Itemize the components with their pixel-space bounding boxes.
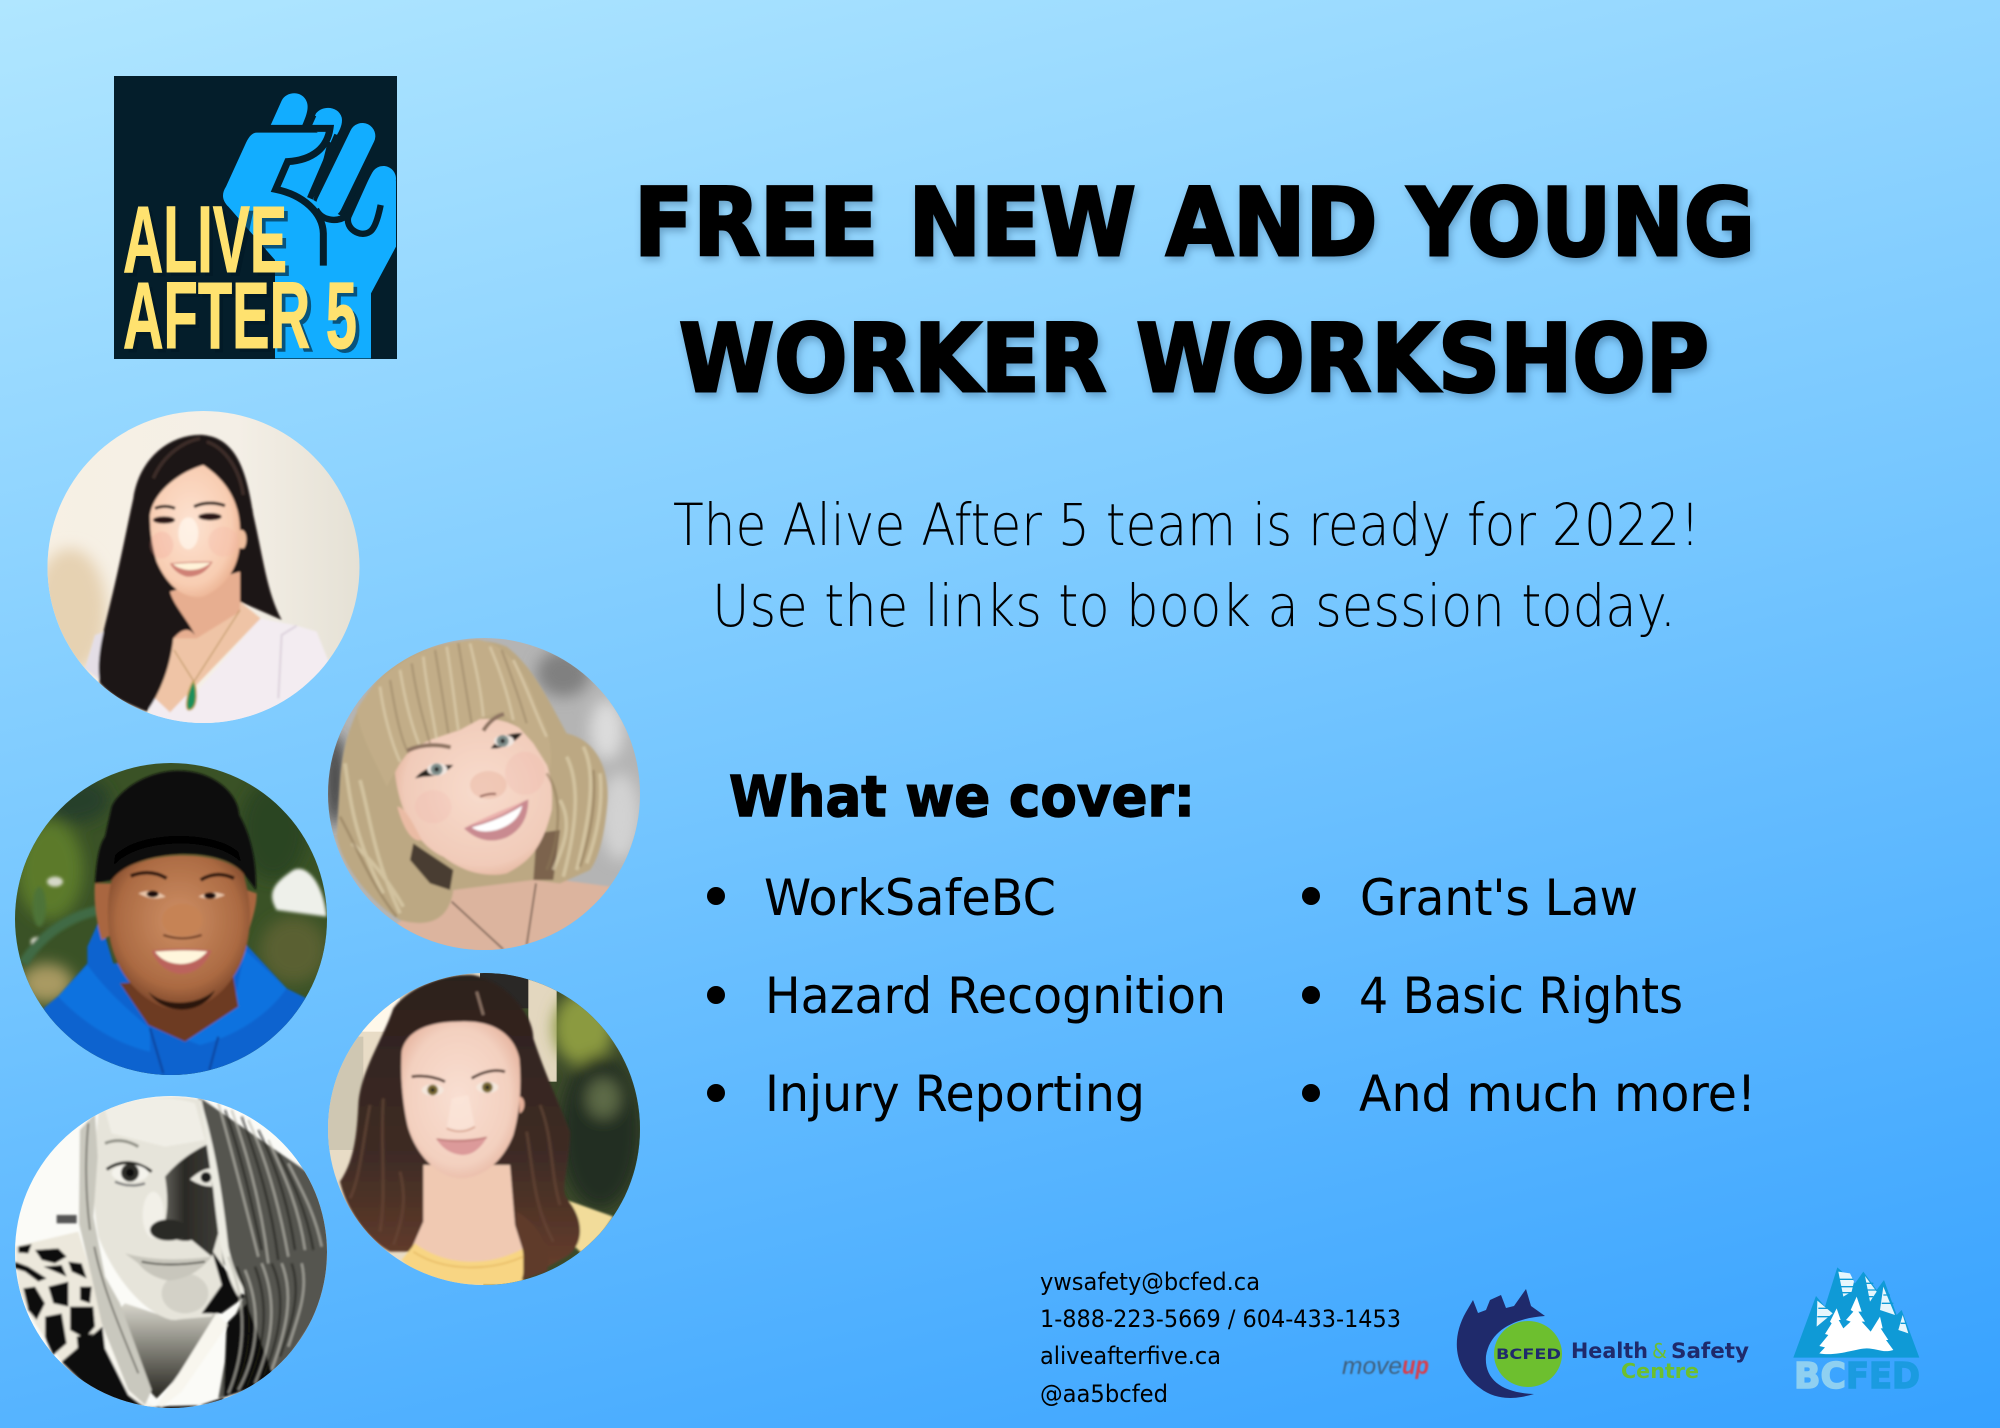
heading: what we cover: What we cover: bbox=[729, 765, 1195, 830]
portrait: blonde woman smiling bbox=[323, 633, 647, 958]
logo: Alive After 5 bbox=[114, 76, 397, 373]
contact details: aliveafterfive.ca bbox=[1040, 1342, 1221, 1370]
logo: moveUP bbox=[1342, 1352, 1429, 1380]
logo: moveUP: up bbox=[1402, 1352, 1429, 1380]
list: topics column 1 bbox=[707, 869, 1226, 1123]
list: topics column 1: Injury Reporting bbox=[765, 1065, 1145, 1123]
icon: raised fist bbox=[223, 93, 396, 358]
contact details: ywsafety@bcfed.ca bbox=[1040, 1268, 1260, 1296]
list: topics column 2: 4 Basic Rights bbox=[1359, 967, 1683, 1025]
logo: BCFED Health and Safety Centre: & bbox=[1652, 1339, 1667, 1363]
contact details: 1-888-223-5669 / 604-433-1453 bbox=[1040, 1305, 1401, 1333]
list: topics column 1: WorkSafeBC bbox=[764, 869, 1056, 927]
logo: BCFED Health and Safety Centre: Safety bbox=[1671, 1339, 1749, 1363]
list: topics column 2: And much more! bbox=[1359, 1065, 1756, 1123]
logo: BCFED Health and Safety Centre bbox=[1457, 1289, 1749, 1398]
intro text: The Alive After 5 team is ready for 2022! bbox=[673, 491, 1700, 559]
list: topics column 2 bbox=[1302, 869, 1756, 1123]
title: WORKER WORKSHOP bbox=[679, 305, 1709, 414]
logo: BCFED mountains: FED bbox=[1846, 1356, 1920, 1397]
portrait: woman with dark hair and yellow top bbox=[323, 968, 647, 1292]
logo wordmark: ALIVE bbox=[127, 191, 291, 297]
contact details: @aa5bcfed bbox=[1040, 1380, 1168, 1408]
title bbox=[634, 169, 1755, 414]
contact details bbox=[1040, 1268, 1401, 1408]
list: topics column 1: Hazard Recognition bbox=[765, 967, 1226, 1025]
portrait: man in black beanie and blue hoodie bbox=[10, 760, 333, 1080]
logo: BCFED mountains: BC bbox=[1794, 1356, 1846, 1397]
portrait: woman with long dark hair bbox=[33, 408, 367, 732]
title: FREE NEW AND YOUNG bbox=[634, 169, 1755, 278]
logo wordmark: AFTER 5 bbox=[127, 267, 361, 373]
intro text bbox=[673, 491, 1700, 640]
logo: BCFED Health and Safety Centre: Health bbox=[1571, 1339, 1648, 1363]
logo wordmark: AFTER 5 bbox=[123, 263, 357, 369]
logo: moveUP: move bbox=[1342, 1353, 1402, 1380]
portrait: black and white selfie bbox=[8, 1093, 333, 1417]
intro text: Use the links to book a session today. bbox=[712, 572, 1676, 640]
logo: BCFED Health and Safety Centre: Centre bbox=[1621, 1359, 1699, 1383]
logo wordmark: ALIVE bbox=[123, 187, 287, 293]
list: topics column 2: Grant's Law bbox=[1360, 869, 1638, 927]
logo wordmark bbox=[124, 206, 360, 353]
logo: BCFED Health and Safety Centre: BCFED bbox=[1496, 1347, 1561, 1363]
logo: BCFED mountains bbox=[1793, 1267, 1920, 1397]
